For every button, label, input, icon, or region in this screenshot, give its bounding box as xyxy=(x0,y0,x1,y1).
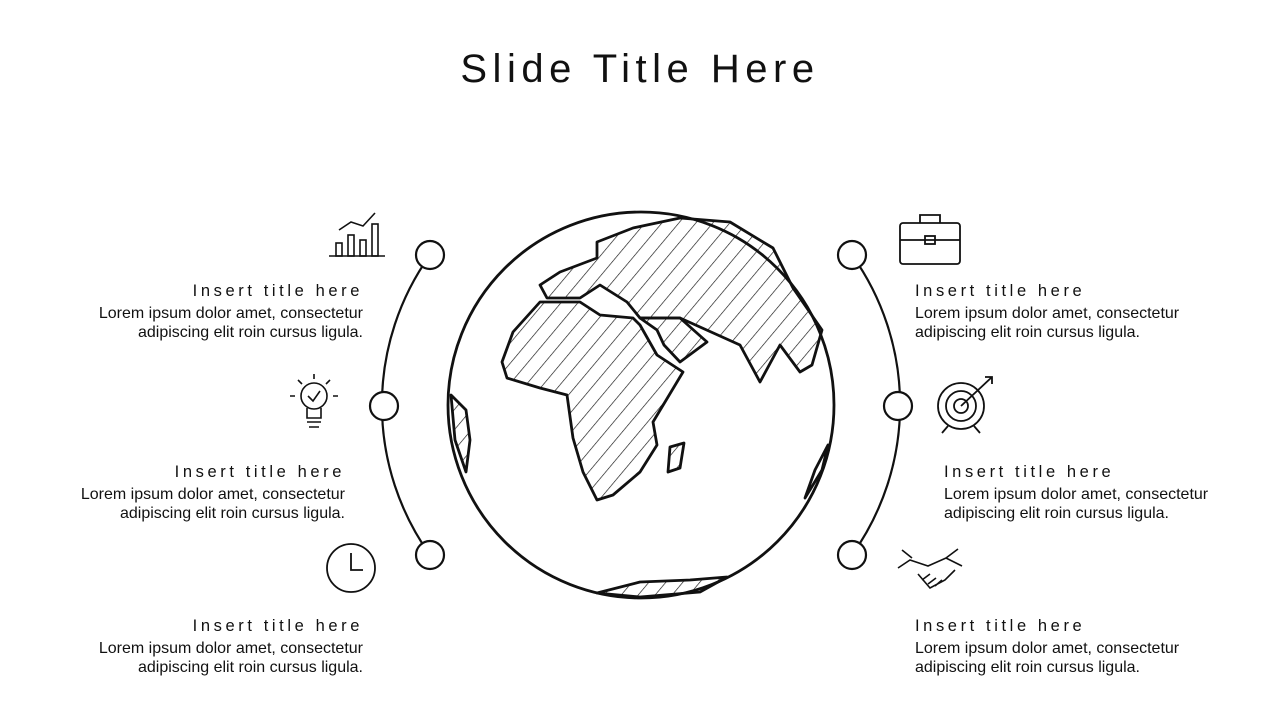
text: left top: Lorem ipsum dolor amet, consectetur xyxy=(99,305,363,322)
text: right bottom: Lorem ipsum dolor amet, consectetur xyxy=(915,640,1179,657)
text: left top: adipiscing elit roin cursus ligula. xyxy=(138,324,363,341)
icon: bar chart xyxy=(329,213,385,256)
globe xyxy=(448,212,834,598)
text: right top: Insert title here xyxy=(915,282,1085,300)
text: left bottom: adipiscing elit roin cursus ligula. xyxy=(138,659,363,676)
text: right middle: Insert title here xyxy=(944,463,1114,481)
icon: clock xyxy=(327,544,375,592)
text: right bottom: Insert title here xyxy=(915,617,1085,635)
text: left bottom: Lorem ipsum dolor amet, consectetur xyxy=(99,640,363,657)
text: right bottom: adipiscing elit roin cursus ligula. xyxy=(915,659,1140,676)
icon: bulb xyxy=(290,374,338,427)
text: right top: adipiscing elit roin cursus ligula. xyxy=(915,324,1140,341)
arcs with nodes xyxy=(370,241,912,569)
text: left top: Insert title here xyxy=(193,282,363,300)
text: left middle: adipiscing elit roin cursus ligula. xyxy=(120,505,345,522)
text: right middle xyxy=(944,463,1208,522)
text: left top xyxy=(99,282,363,341)
icon: handshake xyxy=(898,549,962,588)
text: right top: Lorem ipsum dolor amet, consectetur xyxy=(915,305,1179,322)
text: right top xyxy=(915,282,1179,341)
text: left middle xyxy=(81,463,345,522)
icon: target xyxy=(938,377,992,433)
text: right middle: Lorem ipsum dolor amet, consectetur xyxy=(944,486,1208,503)
text: left bottom: Insert title here xyxy=(193,617,363,635)
text: left middle: Insert title here xyxy=(175,463,345,481)
text: right bottom xyxy=(915,617,1179,676)
text: left bottom xyxy=(99,617,363,676)
text: right middle: adipiscing elit roin cursus ligula. xyxy=(944,505,1169,522)
icon: briefcase xyxy=(900,215,960,264)
title: Slide Title Here xyxy=(460,47,820,91)
text: left middle: Lorem ipsum dolor amet, consectetur xyxy=(81,486,345,503)
